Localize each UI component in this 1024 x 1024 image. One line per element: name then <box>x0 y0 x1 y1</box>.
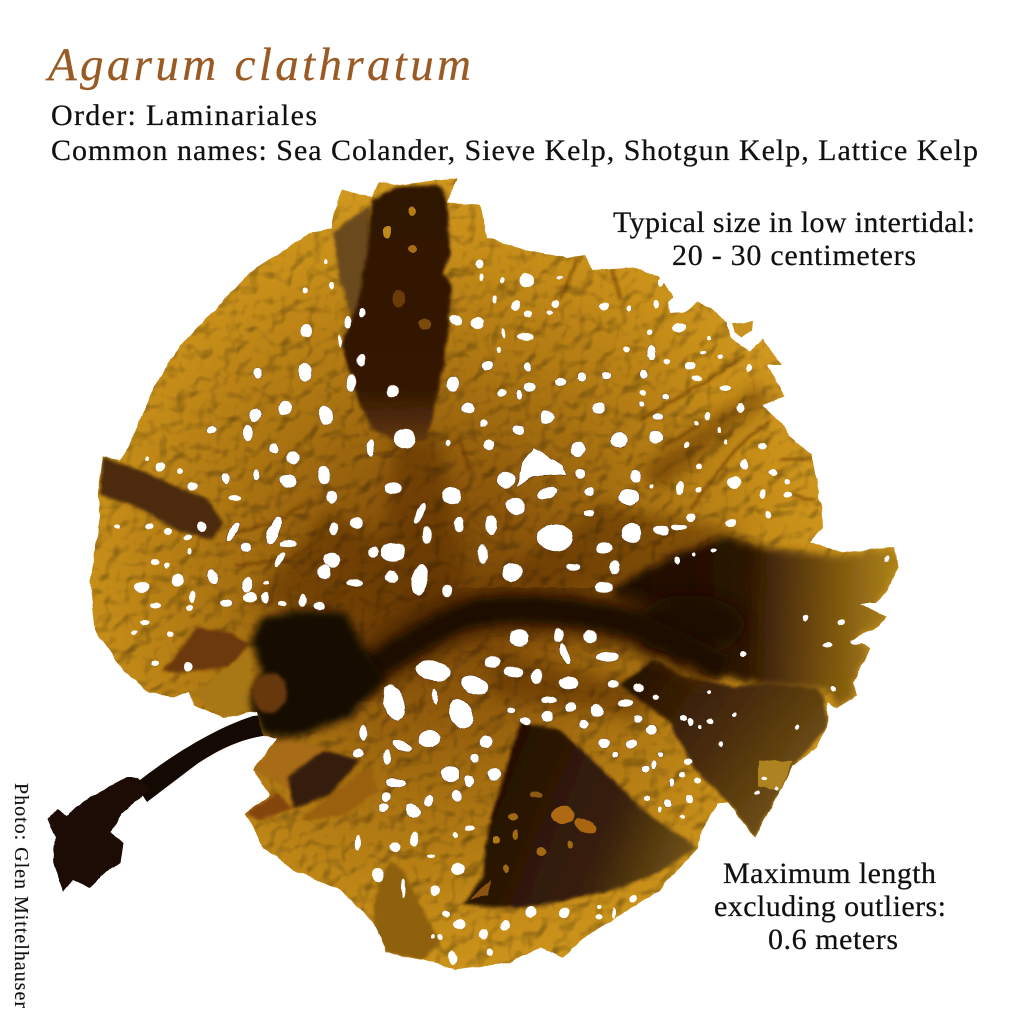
midrib halo <box>345 609 720 680</box>
bottom folded edge <box>373 863 440 960</box>
blade holes: large <box>224 429 642 788</box>
blade holes: top <box>300 259 671 366</box>
midrib base knot <box>250 610 385 738</box>
dark fold: lower right <box>620 660 827 837</box>
blade holes: centre <box>205 345 675 821</box>
kelp photograph illustration <box>47 170 910 980</box>
size note: maximum: Maximum length <box>723 857 936 890</box>
size note: typical: Typical size in low intertidal: <box>613 206 975 239</box>
lower-left flaps <box>245 738 378 820</box>
title: Agarum clathratum <box>45 39 471 91</box>
detached blade fragment <box>732 322 752 338</box>
photo credit: Photo: Glen Mittelhauser <box>10 783 32 1008</box>
left brown flaps <box>163 627 253 717</box>
stipe <box>135 712 300 802</box>
blade surface texture <box>80 170 910 980</box>
size note: maximum <box>714 857 946 956</box>
dark radial veins <box>250 385 770 720</box>
blade holes: bottom <box>355 795 692 966</box>
blade <box>80 170 910 980</box>
size note: typical: 20 - 30 centimeters <box>672 239 916 272</box>
dark fold: right <box>610 536 898 708</box>
fine vein lines <box>230 258 815 620</box>
dark fold: left <box>100 457 223 540</box>
blade holes: left <box>114 457 287 672</box>
size note: typical <box>613 206 975 272</box>
right lobe shadow <box>635 595 745 655</box>
midrib <box>330 609 725 690</box>
size note: maximum: excluding outliers: <box>714 890 946 923</box>
size note: maximum: 0.6 meters <box>768 923 898 956</box>
order text: Order: Laminariales <box>51 99 317 132</box>
common names text: Common names: Sea Colander, Sieve Kelp, Shotgun Kelp, Lattice Kelp <box>51 134 978 167</box>
dark fold: top <box>333 185 452 442</box>
holdfast <box>47 777 150 892</box>
blade holes: right <box>623 300 889 803</box>
dark fold: bottom triangle <box>463 722 697 908</box>
